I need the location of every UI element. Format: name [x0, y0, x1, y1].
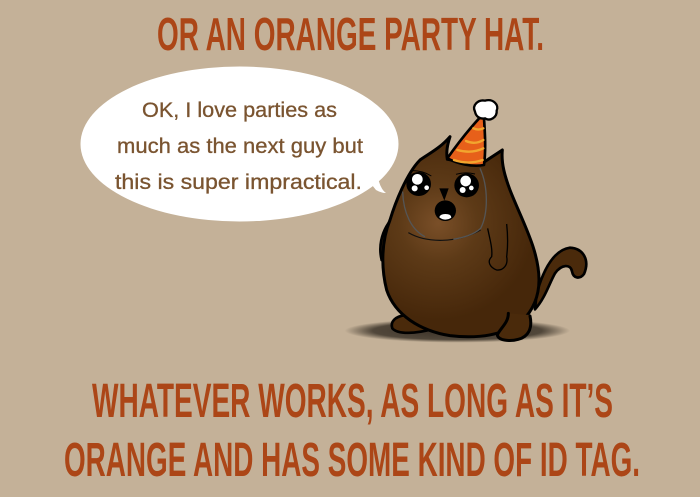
left foot	[392, 315, 432, 333]
left eye	[406, 171, 475, 196]
speech text	[115, 99, 363, 194]
chin line	[408, 230, 481, 240]
right eye	[454, 173, 479, 197]
speech text: much as the next guy but	[117, 135, 363, 158]
right foot	[497, 313, 531, 341]
pompom	[474, 100, 497, 119]
speech bubble	[80, 66, 398, 222]
tail	[535, 248, 586, 309]
nose	[439, 188, 449, 201]
hat elastic	[403, 168, 486, 239]
party hat	[447, 100, 497, 166]
right arm	[488, 224, 508, 270]
ground shadow	[345, 319, 570, 343]
body	[383, 137, 539, 337]
mouth	[435, 200, 456, 221]
speech text: OK, I love parties as	[142, 99, 337, 122]
speech text: this is super impractical.	[115, 171, 362, 194]
left arm	[380, 223, 388, 263]
cat illustration	[345, 100, 586, 343]
